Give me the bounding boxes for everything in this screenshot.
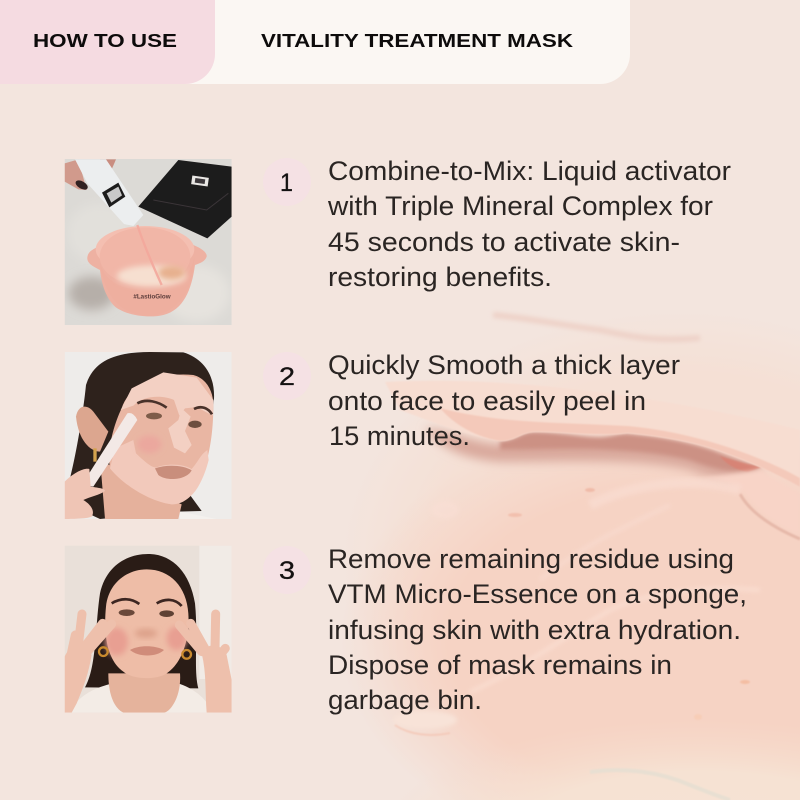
step 3 text: garbage bin. (328, 685, 482, 715)
hair (70, 352, 214, 519)
shadow below the fold (425, 428, 762, 482)
step 1 text: Combine-to-Mix: Liquid activator (328, 156, 731, 186)
step 2 photo: applying mask to face (65, 352, 232, 519)
tab: product name (0, 0, 630, 84)
step 1 number badge: 1 (280, 169, 293, 197)
step 2 text (328, 350, 680, 451)
step 1 number badge (263, 158, 311, 206)
step 2 text: onto face to easily peel in (328, 386, 646, 416)
step 3 text: infusing skin with extra hydration. (328, 615, 741, 645)
step 2 text: Quickly Smooth a thick layer (328, 350, 680, 380)
right hand (202, 645, 232, 713)
left hand (65, 646, 92, 713)
step 1 text: with Triple Mineral Complex for (327, 191, 713, 221)
step 2 number badge (263, 352, 311, 400)
step 3 text: VTM Micro-Essence on a sponge, (328, 579, 747, 609)
tab: how to use (0, 0, 215, 84)
ear and neck (76, 407, 108, 452)
step 1 photo: pouring activator into bowl: #LastioGlow (133, 295, 171, 301)
face skin (109, 374, 213, 504)
step 1 text (327, 156, 731, 292)
step 3 text: Remove remaining residue using (328, 544, 734, 574)
spatula (90, 413, 138, 487)
step 3 number badge: 3 (279, 557, 295, 585)
top and neck (70, 684, 213, 713)
step 3 photo: massaging skin (65, 546, 232, 713)
step 3 text (328, 544, 747, 715)
hand (65, 469, 105, 519)
upper fold (385, 381, 800, 487)
face (105, 569, 189, 678)
step 1 photo: pouring activator into bowl (65, 159, 232, 325)
lower fold (700, 470, 800, 536)
header bar (0, 0, 630, 84)
hair (85, 554, 198, 688)
eyes (137, 401, 167, 408)
mask (121, 372, 213, 416)
step 3 number badge (263, 546, 311, 594)
tab: product name: VITALITY TREATMENT MASK (261, 31, 573, 51)
step 1 text: restoring benefits. (328, 262, 552, 292)
step 3 text: Dispose of mask remains in (328, 650, 672, 680)
step 1 text: 45 seconds to activate skin- (328, 227, 680, 257)
step 2 number badge: 2 (279, 363, 295, 391)
tab: how to use: HOW TO USE (33, 31, 177, 51)
step 2 text: 15 minutes. (329, 421, 470, 451)
cream mask texture (340, 310, 800, 800)
